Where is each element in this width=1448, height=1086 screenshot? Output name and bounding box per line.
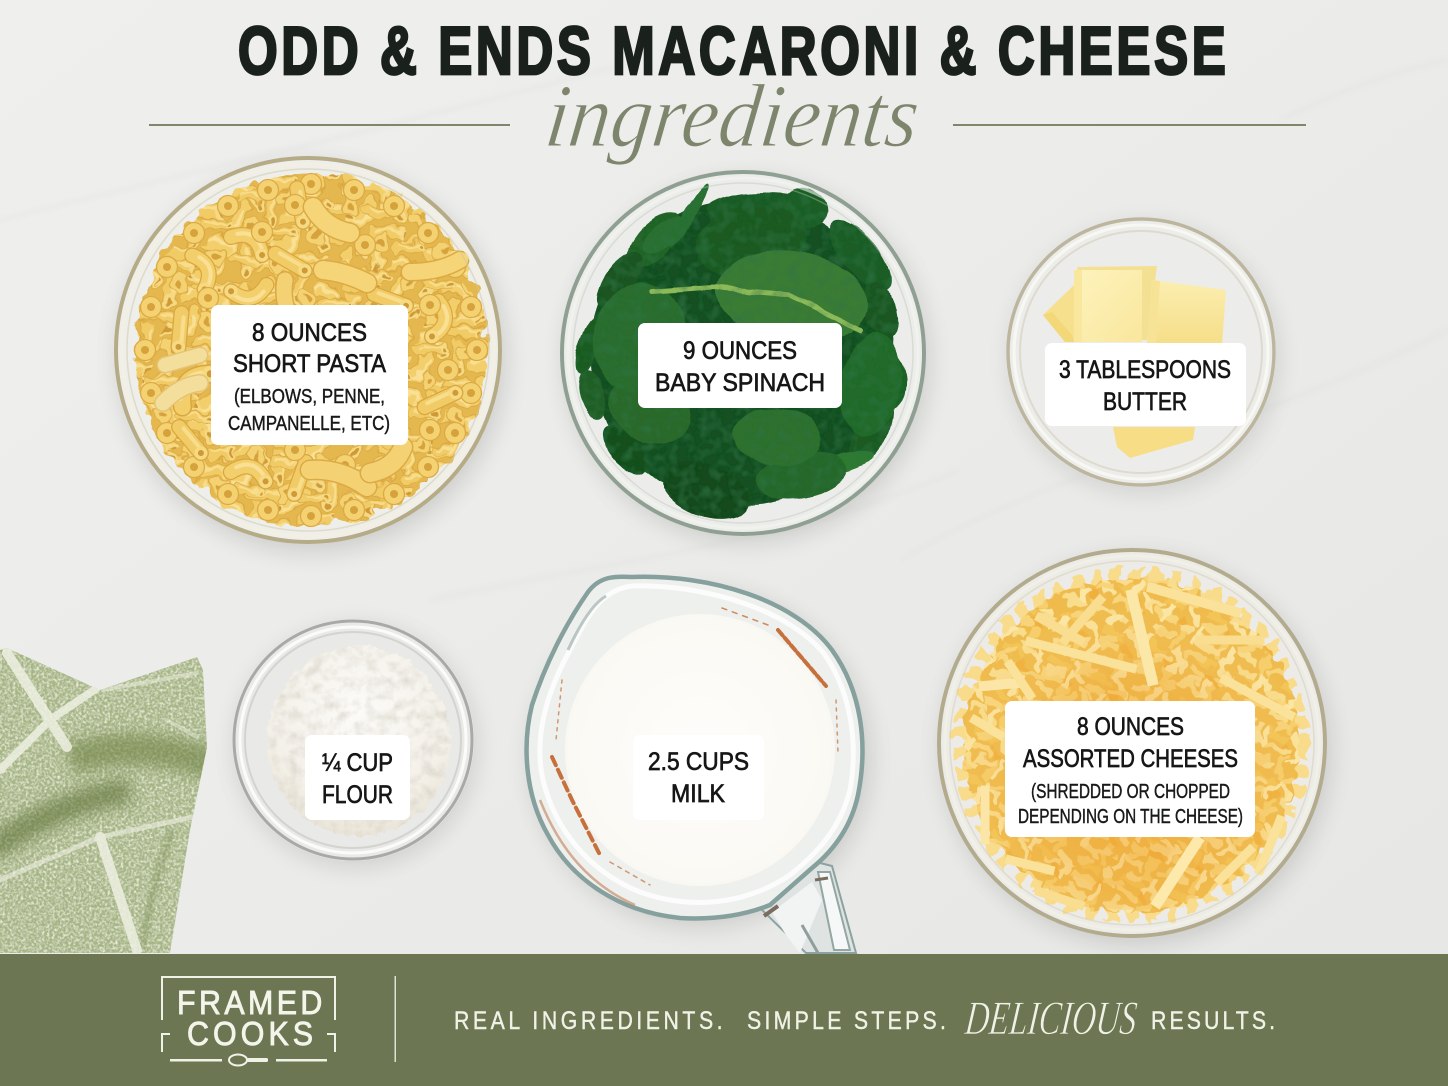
cup glass body xyxy=(527,577,862,918)
label: cheese: (SHREDDED OR CHOPPED xyxy=(1031,781,1230,803)
label: butter xyxy=(1045,343,1246,426)
footer band xyxy=(0,954,1448,1086)
icon: whisk xyxy=(170,1054,327,1066)
panel: flour bowl xyxy=(232,619,476,866)
subtitle: ingredients with side rules: ingredients xyxy=(541,66,925,166)
label: pasta: CAMPANELLE, ETC) xyxy=(228,413,390,435)
hero macaroni xyxy=(163,207,460,487)
label: milk xyxy=(633,735,764,820)
tagline: RESULTS. xyxy=(1151,1006,1275,1034)
label: butter: BUTTER xyxy=(1103,388,1187,416)
label: pasta: 8 OUNCES xyxy=(252,319,367,347)
label: flour: ¼ CUP xyxy=(322,749,393,777)
cup handle xyxy=(756,860,856,953)
label: cheese: DEPENDING ON THE CHEESE) xyxy=(1018,806,1243,828)
logo: Framed Cooks: FRAMED xyxy=(177,984,322,1021)
tagline: REAL INGREDIENTS. xyxy=(454,1006,723,1034)
panel: measuring cup with milk xyxy=(527,577,870,953)
tagline: SIMPLE STEPS. xyxy=(747,1006,946,1034)
butter pieces xyxy=(1043,266,1226,458)
tagline xyxy=(454,992,1275,1045)
panel: butter bowl xyxy=(1006,217,1278,492)
label: butter: 3 TABLESPOONS xyxy=(1059,356,1231,384)
label: spinach: BABY SPINACH xyxy=(655,369,825,397)
label: milk: MILK xyxy=(671,780,725,808)
flour pile xyxy=(267,646,451,836)
cup measurement markings xyxy=(552,608,838,885)
towel xyxy=(0,640,215,954)
logo: Framed Cooks xyxy=(162,977,335,1066)
tagline: DELICIOUS xyxy=(962,992,1139,1045)
logo: Framed Cooks: COOKS xyxy=(187,1015,313,1052)
panel: spinach bowl xyxy=(560,170,929,542)
pasta xyxy=(134,174,488,526)
label: flour xyxy=(305,735,410,820)
label: spinach: 9 OUNCES xyxy=(683,337,797,365)
label: pasta: SHORT PASTA xyxy=(233,350,386,378)
label: cheese: 8 OUNCES xyxy=(1077,713,1184,741)
label: cheese xyxy=(1005,701,1255,837)
spinach leaves xyxy=(570,180,909,530)
label: milk: 2.5 CUPS xyxy=(648,748,749,776)
panel: cheese bowl xyxy=(937,548,1330,944)
title: ODD & ENDS MACARONI & CHEESE xyxy=(238,13,1226,89)
shredded cheese xyxy=(961,575,1301,915)
label: cheese: ASSORTED CHEESES xyxy=(1023,745,1238,773)
label: pasta: (ELBOWS, PENNE, xyxy=(234,386,385,408)
milk surface xyxy=(565,614,835,886)
label: spinach xyxy=(638,323,842,408)
label: pasta xyxy=(211,305,408,445)
label: flour: FLOUR xyxy=(322,781,393,809)
panel: pasta bowl xyxy=(114,156,506,552)
